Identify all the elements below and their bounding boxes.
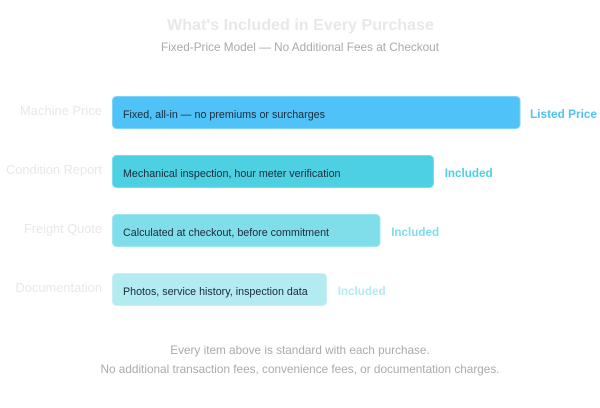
bar text: condition report: Mechanical inspection, hour meter verification — [123, 168, 340, 180]
row: machine price — [20, 96, 597, 128]
bar text: freight quote: Calculated at checkout, before commitment — [123, 227, 329, 239]
bar: documentation — [112, 274, 326, 306]
value: condition report included: Included — [445, 166, 493, 180]
footer line 2: No additional transaction fees, convenience fees, or documentation charges. — [100, 362, 500, 376]
label: condition report: Condition Report — [6, 162, 102, 177]
subtitle: Fixed-Price Model — No Additional Fees at Checkout — [161, 40, 440, 54]
footer note — [100, 343, 500, 376]
row: documentation — [16, 274, 386, 306]
value: listed price: Listed Price — [530, 107, 597, 121]
title: What's Included in Every Purchase — [167, 17, 434, 34]
bar: machine price — [112, 96, 520, 128]
row: condition report — [6, 156, 493, 188]
label: freight quote: Freight Quote — [24, 221, 102, 236]
bar: condition report — [112, 156, 434, 188]
bar text: documentation: Photos, service history, inspection data — [123, 286, 309, 298]
footer line 1: Every item above is standard with each purchase. — [170, 343, 430, 357]
bar text: machine price: Fixed, all-in — no premiums or surcharges — [123, 109, 325, 121]
value: freight quote included: Included — [391, 225, 439, 239]
value: documentation included: Included — [338, 284, 386, 298]
label: machine price: Machine Price — [20, 103, 102, 118]
label: documentation: Documentation — [16, 280, 102, 295]
row: freight quote — [24, 214, 439, 246]
bar: freight quote — [112, 214, 380, 246]
